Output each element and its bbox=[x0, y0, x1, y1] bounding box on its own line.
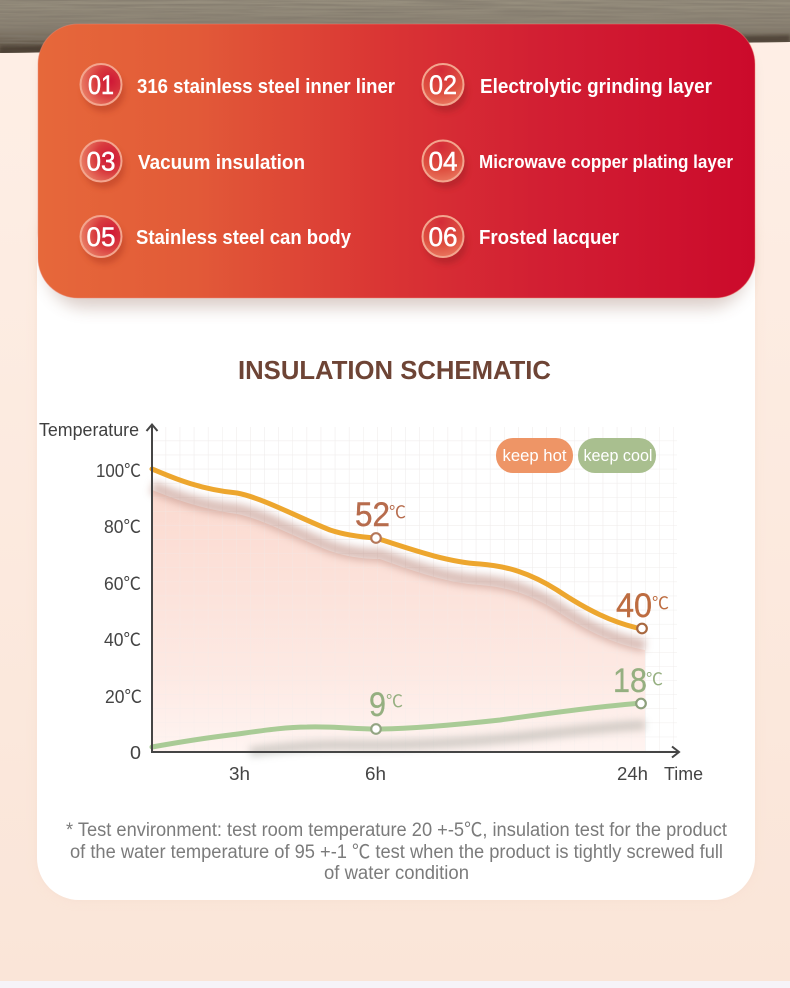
y axis ticks bbox=[96, 461, 142, 763]
layer item 04: Microwave copper plating layer bbox=[479, 152, 733, 172]
layer item 01: 316 stainless steel inner liner bbox=[137, 76, 395, 98]
y axis ticks: 80℃ bbox=[104, 517, 141, 537]
point 40 degrees: ℃ bbox=[652, 594, 669, 613]
x axis ticks: 6h bbox=[365, 764, 386, 784]
point 9 degrees bbox=[369, 686, 403, 734]
layer item 04: 04 bbox=[428, 146, 458, 176]
x axis ticks bbox=[229, 764, 648, 784]
cool curve bbox=[152, 703, 642, 747]
point 52 degrees bbox=[355, 496, 406, 543]
layer item 04 bbox=[422, 140, 733, 188]
test environment note bbox=[66, 820, 728, 884]
hot curve shadow bbox=[152, 487, 645, 646]
layer item 05 bbox=[80, 216, 352, 264]
layer item 06: 06 bbox=[428, 222, 458, 252]
y axis ticks: 60℃ bbox=[104, 574, 141, 594]
point 40 degrees bbox=[616, 587, 669, 633]
y axis ticks: 0 bbox=[130, 743, 141, 763]
layer item 03: 03 bbox=[86, 146, 116, 176]
x axis ticks: 24h bbox=[617, 764, 648, 784]
layer item 02: Electrolytic grinding layer bbox=[480, 76, 712, 98]
point 52 degrees: ℃ bbox=[389, 503, 406, 522]
wood surface band bbox=[0, 0, 790, 54]
x axis title: Time bbox=[664, 764, 703, 784]
cool curve shadow bbox=[250, 725, 645, 752]
layer item 05: Stainless steel can body bbox=[136, 227, 352, 249]
grid over fill bbox=[152, 427, 645, 752]
layer item 06: Frosted lacquer bbox=[479, 227, 619, 249]
hot curve bbox=[152, 469, 642, 629]
chart grid bbox=[152, 427, 677, 752]
heading: insulation schematic: INSULATION SCHEMATIC bbox=[238, 355, 551, 385]
y axis ticks: 20℃ bbox=[105, 687, 142, 707]
legend: keep hot: keep hot bbox=[502, 446, 567, 465]
test environment note: of the water temperature of 95 +-1 ℃ test when the product is tightly screwed full bbox=[70, 842, 723, 863]
axis shadow bbox=[155, 758, 235, 764]
point 18 degrees: ℃ bbox=[646, 670, 663, 689]
point 9 degrees: ℃ bbox=[386, 692, 403, 711]
point 40 degrees: 40 bbox=[616, 587, 652, 625]
point 52 degrees: 52 bbox=[355, 496, 390, 534]
layer item 01 bbox=[80, 64, 395, 112]
test environment note: of water condition bbox=[324, 863, 469, 884]
point 18 degrees bbox=[613, 662, 663, 708]
legend: keep cool: keep cool bbox=[584, 446, 652, 465]
x axis ticks: 3h bbox=[229, 764, 250, 784]
y axis ticks: 40℃ bbox=[104, 630, 141, 650]
hot curve area fill bbox=[152, 490, 645, 752]
legend: keep hot bbox=[496, 438, 573, 473]
layer item 03: Vacuum insulation bbox=[138, 152, 305, 174]
y axis title: Temperature bbox=[39, 420, 139, 440]
chart: temperature over time bbox=[39, 420, 703, 784]
layer item 02 bbox=[422, 64, 712, 112]
layer item 03 bbox=[80, 140, 305, 188]
axes bbox=[146, 424, 679, 758]
white content panel bbox=[37, 200, 755, 900]
layer item 01: 01 bbox=[88, 70, 114, 100]
test environment note: * Test environment: test room temperature 20 +-5℃, insulation test for the product bbox=[66, 820, 728, 841]
layer item 06 bbox=[422, 216, 619, 264]
layer item 05: 05 bbox=[86, 222, 116, 252]
legend: keep cool bbox=[578, 438, 656, 473]
y axis ticks: 100℃ bbox=[96, 461, 141, 481]
point 9 degrees: 9 bbox=[369, 686, 386, 724]
point 18 degrees: 18 bbox=[613, 662, 647, 700]
panel: material layers bbox=[38, 24, 755, 308]
layer item 02: 02 bbox=[429, 70, 457, 100]
